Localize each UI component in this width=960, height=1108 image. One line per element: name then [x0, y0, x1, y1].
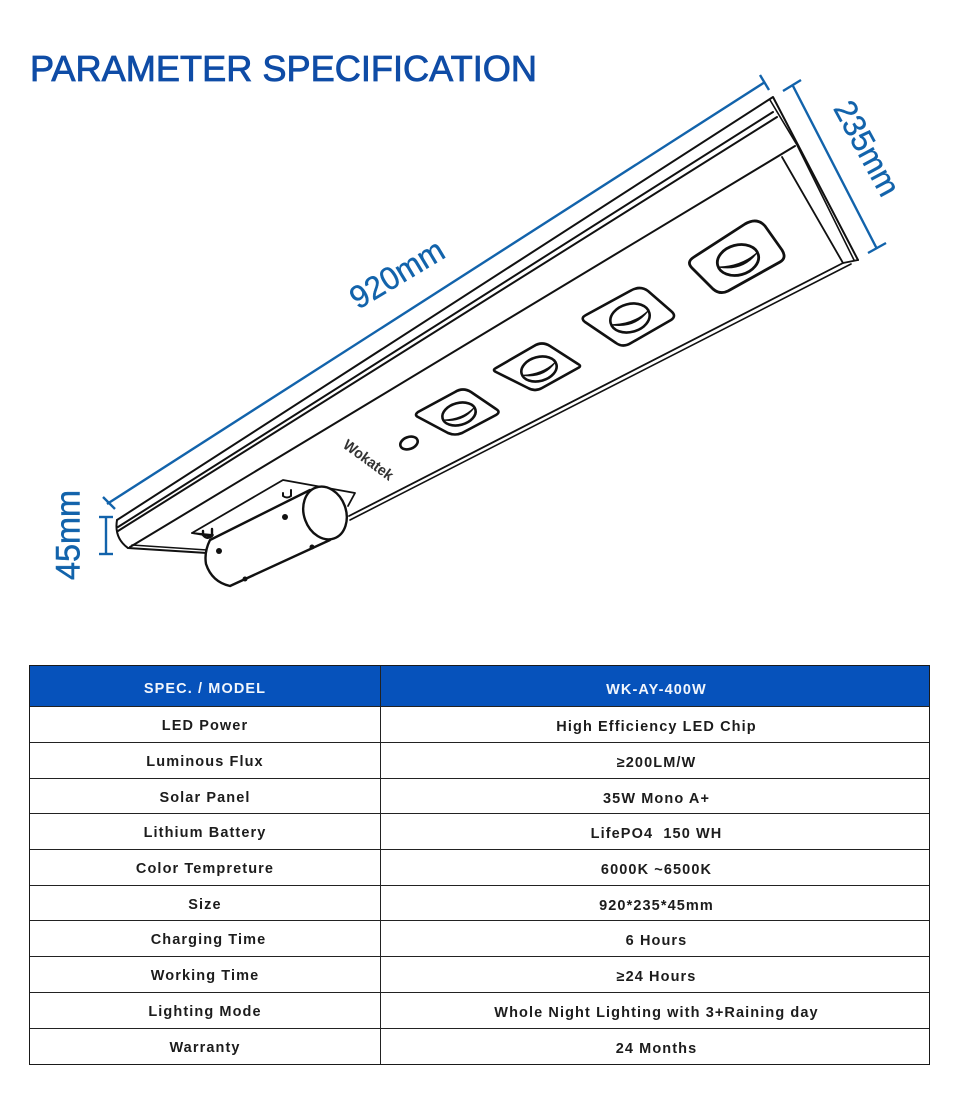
- row: Solar Panel: Solar Panel: [159, 790, 251, 806]
- row: Lithium Battery: [30, 814, 929, 850]
- dimension: length arrow: [103, 75, 769, 509]
- LED module 4: [689, 221, 784, 293]
- title: PARAMETER SPECIFICATION: [30, 48, 537, 89]
- row: Solar Panel: [30, 779, 929, 814]
- row: Working Time: ≥24 Hours: [617, 969, 696, 985]
- row: LED Power: High Efficiency LED Chip: [556, 719, 757, 735]
- table header row: [30, 666, 929, 707]
- row: Size: 920*235*45mm: [599, 898, 714, 914]
- LED module 3: [583, 288, 674, 346]
- row: Color Tempreture: 6000K ~6500K: [601, 862, 712, 878]
- row: Luminous Flux: Luminous Flux: [146, 754, 264, 770]
- row: Charging Time: 6 Hours: [626, 933, 687, 949]
- row: Solar Panel: 35W Mono A+: [603, 790, 710, 806]
- specification table: [29, 665, 930, 1065]
- row: Working Time: Working Time: [151, 968, 259, 984]
- row: Warranty: [169, 1029, 697, 1064]
- row: Luminous Flux: [30, 743, 929, 779]
- row: Lighting Mode: Whole Night Lighting with 3+Raining day: [494, 1005, 819, 1021]
- illustration: solar street light outline: [116, 97, 858, 586]
- housing outline: [116, 97, 858, 553]
- row: Size: Size: [188, 896, 222, 912]
- battery cylinder: [206, 480, 354, 586]
- row: Warranty: 24 Months: [616, 1041, 697, 1057]
- LED module 2: [494, 344, 580, 390]
- row: Color Tempreture: [30, 850, 929, 886]
- row: Lithium Battery: Lithium Battery: [144, 825, 266, 841]
- row: Color Tempreture: Color Tempreture: [136, 861, 274, 877]
- label: 920mm: 920mm: [343, 232, 451, 316]
- row: Lighting Mode: [30, 993, 929, 1029]
- brand logo: Wokatek: [340, 436, 397, 485]
- dimension: width arrow: [783, 80, 886, 253]
- label: 45mm: 45mm: [50, 490, 88, 580]
- row: Charging Time: Charging Time: [151, 932, 266, 948]
- row: Warranty: Warranty: [169, 1040, 241, 1056]
- row: Lighting Mode: Lighting Mode: [148, 1004, 262, 1020]
- table header row: SPEC. / MODEL: [144, 681, 266, 697]
- indicator oval: [398, 434, 420, 452]
- label: 235mm: 235mm: [827, 94, 907, 202]
- row: Size: [30, 886, 929, 921]
- table header row: WK-AY-400W: [606, 682, 707, 698]
- dimension: height arrow: [99, 517, 113, 554]
- mounting bracket: [192, 480, 355, 538]
- row: Charging Time: [30, 921, 929, 957]
- row: LED Power: LED Power: [162, 718, 248, 734]
- row: Working Time: [30, 957, 929, 993]
- row: LED Power: [30, 707, 929, 743]
- row: Lithium Battery: LifePO4 150 WH: [591, 826, 722, 842]
- row: Luminous Flux: ≥200LM/W: [617, 755, 696, 771]
- LED module 1: [416, 390, 498, 434]
